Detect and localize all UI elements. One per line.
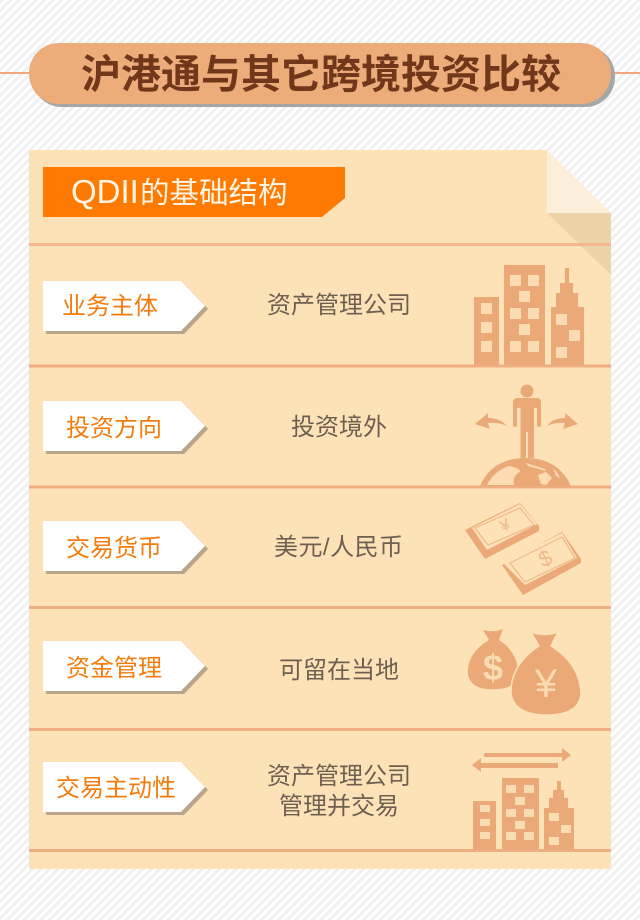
title text: 沪港通与其它跨境投资比较 xyxy=(81,53,561,97)
text: may stay local: 可留在当地 xyxy=(279,657,399,684)
text: asset manager manages and trades xyxy=(267,763,411,820)
tag: 投资方向 xyxy=(43,401,208,454)
icon: arrows and city xyxy=(472,748,574,850)
tag: 交易主动性 xyxy=(43,762,208,815)
tag: 资金管理 xyxy=(43,641,208,694)
tag: 交易主动性: 交易主动性 xyxy=(56,775,176,802)
text: USD / RMB: 美元/人民币 xyxy=(274,534,403,561)
tag: 交易货币: 交易货币 xyxy=(66,535,162,562)
tag: 资金管理: 资金管理 xyxy=(66,655,162,682)
tag: 投资方向: 投资方向 xyxy=(66,415,162,442)
text: asset manager: 资产管理公司 xyxy=(267,292,411,319)
text: asset manager manages and trades: 管理并交易 xyxy=(279,793,399,820)
title banner xyxy=(0,43,640,107)
icon: cash bundles: $ xyxy=(534,545,556,572)
tag: 业务主体 xyxy=(43,281,208,334)
tag: 业务主体: 业务主体 xyxy=(62,293,158,320)
icon: cash bundles xyxy=(465,503,581,595)
row 4: fund management xyxy=(43,629,581,715)
section heading xyxy=(43,167,345,217)
row 3: trading currency xyxy=(43,503,581,595)
tag: 交易货币 xyxy=(43,521,208,574)
icon: money bags: ¥ xyxy=(534,662,558,706)
row 2: investment direction xyxy=(43,384,578,486)
text: asset manager manages and trades: 资产管理公司 xyxy=(267,763,411,790)
icon: person on globe with arrows xyxy=(475,384,578,486)
icon: city buildings xyxy=(474,265,584,365)
section heading: 的基础结构 xyxy=(140,177,288,210)
icon: money bags xyxy=(468,629,581,715)
row 1: business entity xyxy=(43,265,584,365)
text: invest overseas: 投资境外 xyxy=(291,414,387,441)
section heading: QDII xyxy=(71,173,139,210)
icon: cash bundles: ¥ xyxy=(496,515,514,536)
page fold corner xyxy=(547,150,611,275)
row 5: trading initiative xyxy=(43,748,574,850)
panel: QDII basic structure xyxy=(29,150,611,869)
icon: money bags: $ xyxy=(483,647,503,688)
